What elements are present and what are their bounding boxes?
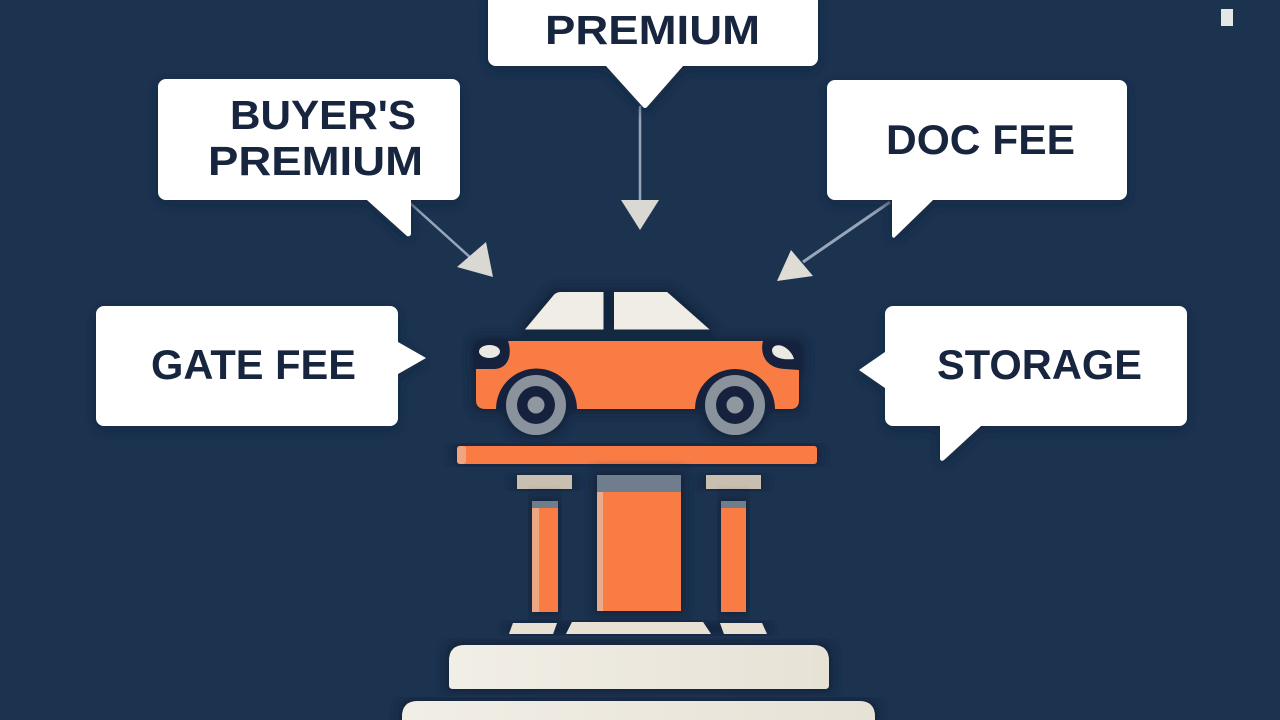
left column	[532, 501, 558, 612]
car	[474, 292, 802, 435]
callout: doc fee	[827, 80, 1127, 238]
arrow: buyer's premium to car	[410, 203, 493, 277]
upper step	[449, 645, 829, 689]
callout: buyer's premium: PREMIUM	[208, 138, 423, 184]
column capitals	[517, 475, 761, 489]
callout: gate fee: GATE FEE	[151, 341, 356, 388]
car windows	[525, 292, 710, 330]
callout: storage	[859, 306, 1187, 461]
callout: gate fee	[96, 306, 426, 426]
right wheel	[705, 375, 765, 435]
arrow: doc fee to car	[777, 202, 890, 281]
callout: premium: PREMIUM	[545, 7, 760, 53]
callout: premium	[488, 0, 818, 108]
right column	[721, 501, 746, 612]
callout: doc fee: DOC FEE	[886, 116, 1075, 163]
center column	[597, 475, 681, 611]
lift platform	[457, 446, 817, 464]
car body	[476, 341, 799, 409]
callout: storage: STORAGE	[937, 341, 1142, 388]
left wheel	[506, 375, 566, 435]
callout: buyer's premium: BUYER'S	[230, 92, 416, 138]
arrow: premium to car	[621, 106, 659, 230]
callout: buyer's premium	[158, 79, 460, 236]
pedestal	[402, 446, 875, 720]
lower step	[402, 701, 875, 720]
column bases	[509, 622, 767, 634]
headlights	[479, 345, 794, 359]
dark surrounds for lights and wheels	[474, 340, 802, 409]
small corner mark	[1221, 9, 1233, 26]
